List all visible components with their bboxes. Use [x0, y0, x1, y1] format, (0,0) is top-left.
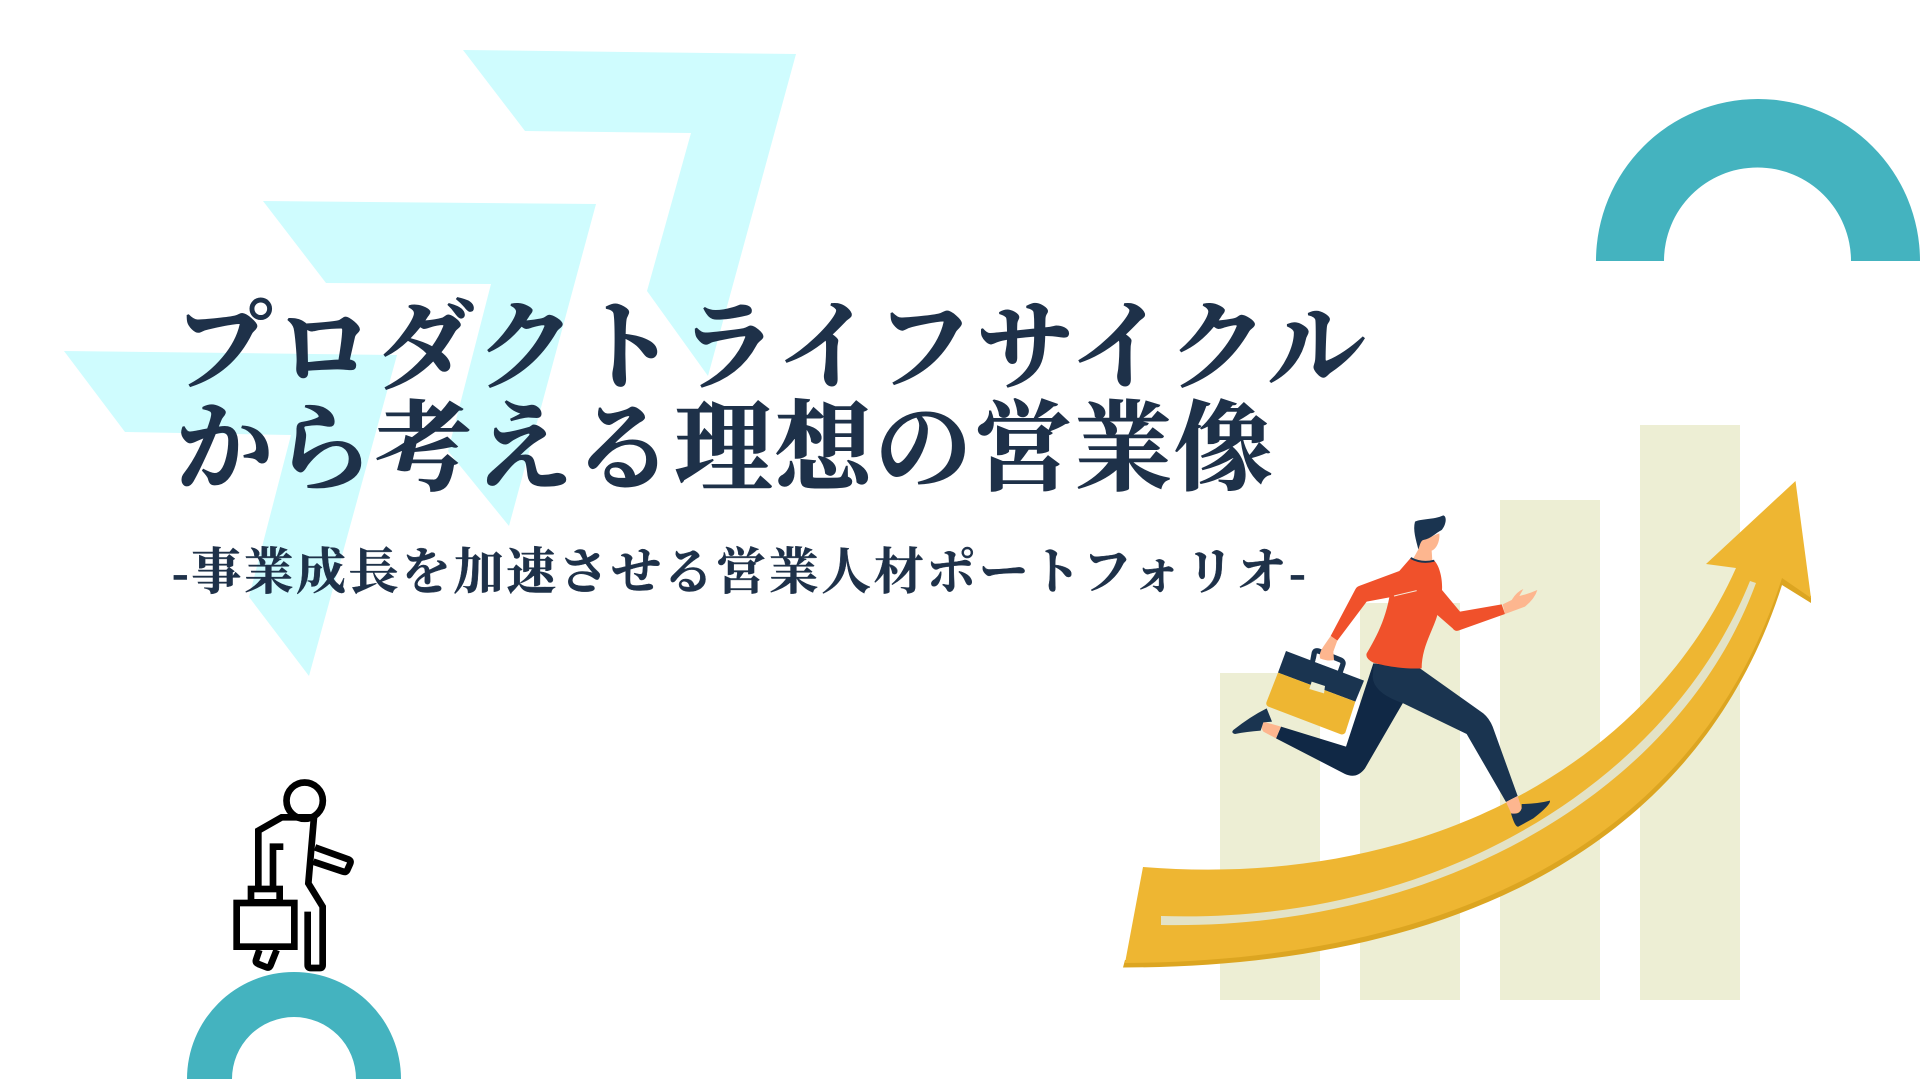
- growth arrow: [1123, 481, 1811, 968]
- back leg: [1276, 663, 1420, 776]
- subtitle: -事業成長を加速させる営業人材ポートフォリオ-: [172, 544, 1308, 600]
- decorative cyan chevrons: [64, 50, 796, 676]
- title line 2: から考える理想の営業像: [175, 396, 1274, 504]
- running businessman with briefcase: [1232, 515, 1550, 827]
- front leg: [1373, 663, 1518, 802]
- bottom-left teal arch: [187, 972, 401, 1079]
- sweater: [1331, 558, 1505, 669]
- head and hands: [1320, 515, 1537, 661]
- briefcase: [1266, 651, 1364, 734]
- title line 1: プロダクトライフサイクル: [174, 295, 1368, 403]
- top-right teal arch: [1596, 99, 1920, 261]
- icon: walking person with suitcase: [237, 782, 351, 968]
- bar chart: [1220, 425, 1740, 1000]
- feet and shoes: [1232, 708, 1550, 827]
